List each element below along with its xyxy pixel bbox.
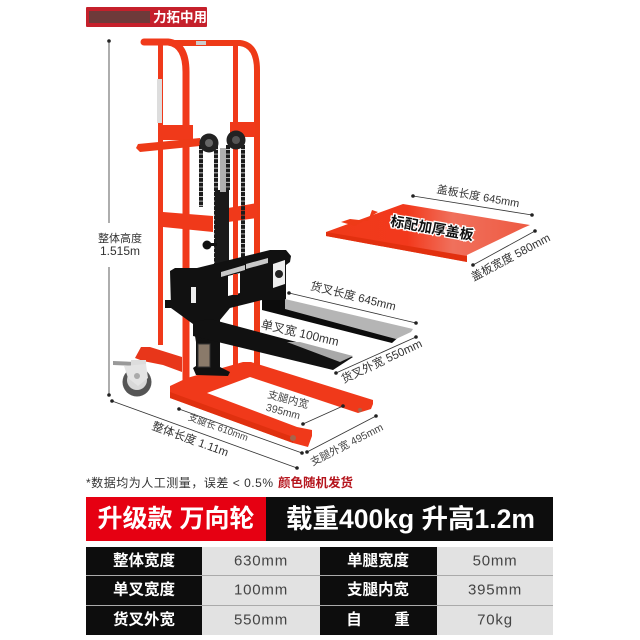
front fork <box>193 319 353 370</box>
dimension: overall height: 整体高度 <box>98 231 142 245</box>
dimension: cover width: 盖板宽度 580mm <box>469 230 552 284</box>
dimension: overall height: 1.515m <box>100 244 140 258</box>
mast frame <box>144 41 257 384</box>
measurement note <box>86 475 354 490</box>
row 1 <box>113 550 517 570</box>
row 3: 自 <box>346 610 362 628</box>
caster arm <box>113 347 182 374</box>
base legs <box>170 362 373 447</box>
row 3: 550mm <box>234 612 288 628</box>
row 2: 支腿内宽 <box>347 580 409 598</box>
dimension: leg outer width: 支腿外宽 495mm <box>308 421 386 468</box>
banner: 载重400kg 升高1.2m <box>286 504 535 534</box>
measurement note: *数据均为人工测量，误差 < 0.5% <box>86 475 273 490</box>
brand badge <box>86 7 207 27</box>
cover plate <box>326 204 530 262</box>
dimension: cover length <box>411 182 534 217</box>
dimension: fork length <box>287 279 418 325</box>
dimension: overall height <box>98 39 142 397</box>
spec table <box>86 547 553 635</box>
dimension: leg inner width <box>265 388 345 426</box>
dimension: overall length <box>110 399 299 470</box>
row 3: 70kg <box>477 612 513 628</box>
row 3: 货叉外宽 <box>113 610 175 628</box>
dimension: leg length <box>177 407 304 455</box>
cover plate label: 标配加厚盖板 <box>389 213 475 243</box>
dimension: single fork width: 单叉宽 100mm <box>260 316 340 349</box>
row 2: 单叉宽度 <box>113 580 175 598</box>
row 3: 重 <box>394 610 410 628</box>
row 1: 整体宽度 <box>113 550 175 570</box>
dimension: leg inner width: 支腿内宽 <box>266 388 311 411</box>
fork carriage <box>165 250 291 376</box>
dimension: cover length: 盖板长度 645mm <box>436 182 521 210</box>
dimension: leg length: 支腿长 610mm <box>187 411 250 444</box>
dimension: fork length: 货叉长度 645mm <box>309 279 397 313</box>
banner <box>86 497 553 541</box>
row 1: 50mm <box>473 552 517 570</box>
row 3 <box>113 610 513 628</box>
dimension: overall length: 整体长度 1.11m <box>150 419 230 459</box>
row 2: 100mm <box>234 582 288 598</box>
brand badge: 力拓中用 <box>153 9 207 25</box>
measurement note: 颜色随机发货 <box>278 475 354 490</box>
row 1: 630mm <box>234 552 288 570</box>
caster wheel <box>122 364 152 396</box>
dimension: fork outer width: 货叉外宽 550mm <box>339 336 424 386</box>
dimension: leg inner width: 395mm <box>265 402 302 422</box>
row 2: 395mm <box>468 582 522 598</box>
chains and sprockets <box>200 130 246 270</box>
stacker truck <box>113 41 413 447</box>
banner: 升级款 万向轮 <box>98 505 254 533</box>
rear fork <box>262 299 413 343</box>
row 2 <box>113 580 522 598</box>
row 1: 单腿宽度 <box>347 550 409 570</box>
mast brackets <box>136 122 257 232</box>
